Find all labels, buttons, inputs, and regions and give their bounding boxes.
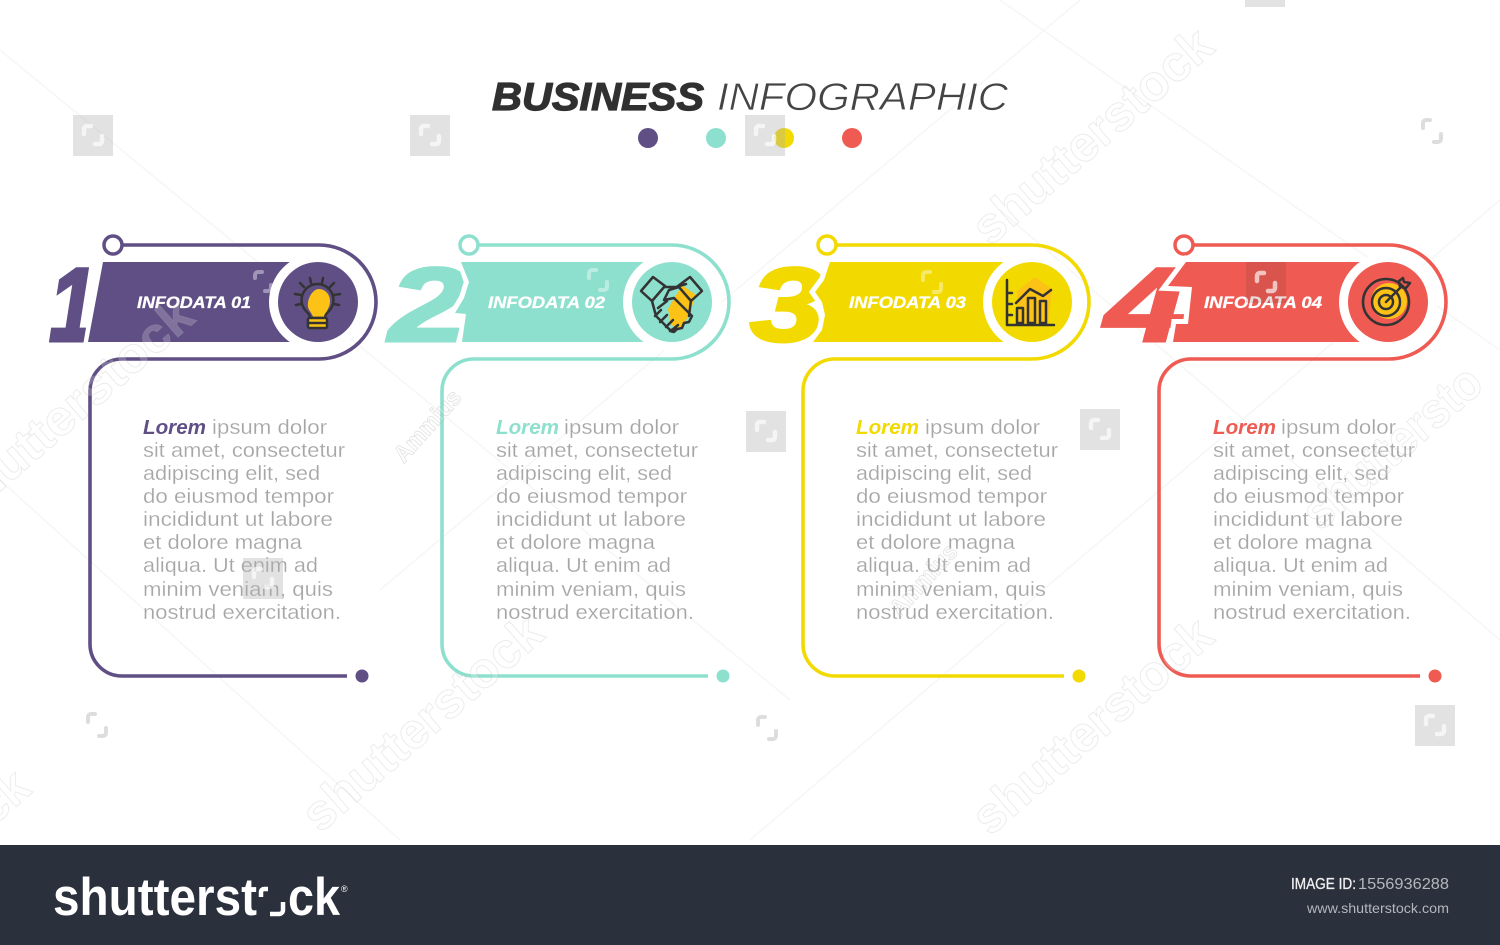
footer bar <box>0 845 1500 945</box>
step 2 banner <box>455 262 664 342</box>
step 2 body text: sit amet, consectetur <box>496 440 698 462</box>
step 2 body text: minim veniam, quis <box>496 579 686 601</box>
step 1 outline <box>90 245 376 676</box>
step 4 body text: do eiusmod tempor <box>1213 486 1404 508</box>
step 2 body text: adipiscing elit, sed <box>496 463 672 485</box>
step 4 body text: nostrud exercitation. <box>1213 602 1411 624</box>
step 2 number: 2 <box>386 247 467 364</box>
footer logo: shutterst <box>53 868 257 927</box>
watermark overlay: Ammius <box>884 539 963 622</box>
step 1 body text: ipsum dolor <box>212 417 327 439</box>
step 3 number: 3 <box>750 247 824 364</box>
step 1 body text: aliqua. Ut enim ad <box>143 555 318 577</box>
footer logo: ® <box>341 884 348 894</box>
step 3 body text: incididunt ut labore <box>856 509 1046 531</box>
step 1 end dot <box>356 670 368 682</box>
step 3 top ring <box>818 236 836 254</box>
step 3 end dot <box>1072 670 1086 682</box>
step 2 body text: nostrud exercitation. <box>496 602 694 624</box>
step 1 body text: sit amet, consectetur <box>143 440 345 462</box>
step 4 top ring <box>1175 236 1193 254</box>
step 4 outline <box>1159 245 1446 676</box>
step 4 body text: et dolore magna <box>1213 532 1373 554</box>
step 3 body text <box>856 417 1058 624</box>
step 1 top ring <box>104 236 122 254</box>
step 2 outline <box>442 245 729 676</box>
step 2 body text <box>496 417 698 624</box>
footer logo: ck <box>288 868 340 927</box>
footer url: www.shutterstock.com <box>1306 900 1449 916</box>
step 2 top ring <box>460 236 478 254</box>
step 1 body text: nostrud exercitation. <box>143 602 341 624</box>
step 1 body text: Lorem <box>143 417 206 439</box>
title <box>492 76 1009 119</box>
panel: step 3 <box>750 236 1089 682</box>
step 1 body text: do eiusmod tempor <box>143 486 334 508</box>
step 4 body text <box>1213 417 1415 624</box>
step 3 outline <box>803 245 1089 676</box>
step 4 banner <box>1168 262 1380 342</box>
step 3 body text: et dolore magna <box>856 532 1016 554</box>
step 4 body text: ipsum dolor <box>1281 417 1396 439</box>
step 3 body text: aliqua. Ut enim ad <box>856 555 1031 577</box>
step 1 icon: light bulb <box>269 253 367 351</box>
footer image id: 1556936288 <box>1358 876 1449 893</box>
step 3 icon: bar chart <box>983 253 1081 351</box>
step 1 body text: minim veniam, quis <box>143 579 333 601</box>
step 3 body text: Lorem <box>856 417 919 439</box>
step 3 body text: ipsum dolor <box>925 417 1040 439</box>
step 3 banner <box>813 262 1024 342</box>
step 3 body text: nostrud exercitation. <box>856 602 1054 624</box>
step 2 body text: aliqua. Ut enim ad <box>496 555 671 577</box>
colour dots row <box>638 128 862 148</box>
title: light word: INFOGRAPHIC <box>717 76 1009 119</box>
step 4 body text: minim veniam, quis <box>1213 579 1403 601</box>
footer image id <box>1291 876 1449 893</box>
step 2 body text: do eiusmod tempor <box>496 486 687 508</box>
watermark overlay: shutterstock <box>290 603 554 842</box>
step 3 body text: sit amet, consectetur <box>856 440 1058 462</box>
step 1 banner label: INFODATA 01 <box>137 294 251 312</box>
step 2 body text: ipsum dolor <box>564 417 679 439</box>
step 3 body text: adipiscing elit, sed <box>856 463 1032 485</box>
step 2 body text: et dolore magna <box>496 532 656 554</box>
step 4 icon: target <box>1339 253 1437 351</box>
footer image id: IMAGE ID: <box>1291 876 1356 893</box>
panel: step 2 <box>386 236 730 682</box>
step 4 body text: aliqua. Ut enim ad <box>1213 555 1388 577</box>
step 3 banner label: INFODATA 03 <box>849 294 966 312</box>
watermark overlay: shutterstock <box>960 606 1224 845</box>
step 2 body text: incididunt ut labore <box>496 509 686 531</box>
step 4 number: 4 <box>1102 247 1187 364</box>
panel: step 4 <box>1102 236 1446 682</box>
step 4 end dot <box>1428 670 1442 682</box>
step 2 icon: handshake <box>623 253 721 351</box>
watermark overlay: shutterstock <box>960 16 1224 255</box>
panel: step 1 <box>49 236 376 682</box>
step 4 body text: adipiscing elit, sed <box>1213 463 1389 485</box>
step 3 body text: minim veniam, quis <box>856 579 1046 601</box>
step 1 body text: adipiscing elit, sed <box>143 463 320 485</box>
step 1 body text: et dolore magna <box>143 532 303 554</box>
step 4 body text: sit amet, consectetur <box>1213 440 1415 462</box>
step 2 banner label: INFODATA 02 <box>488 294 605 312</box>
step 4 body text: Lorem <box>1213 417 1276 439</box>
step 4 body text: incididunt ut labore <box>1213 509 1403 531</box>
step 1 body text <box>143 417 345 624</box>
title: bold word: BUSINESS <box>492 76 704 119</box>
watermark overlay: Ammius <box>388 385 467 468</box>
step 1 banner <box>88 262 310 342</box>
step 2 end dot <box>716 670 730 682</box>
step 1 number: 1 <box>49 247 96 364</box>
step 1 body text: incididunt ut labore <box>143 509 333 531</box>
step 4 banner label: INFODATA 04 <box>1204 294 1322 312</box>
step 2 body text: Lorem <box>496 417 559 439</box>
step 3 body text: do eiusmod tempor <box>856 486 1047 508</box>
